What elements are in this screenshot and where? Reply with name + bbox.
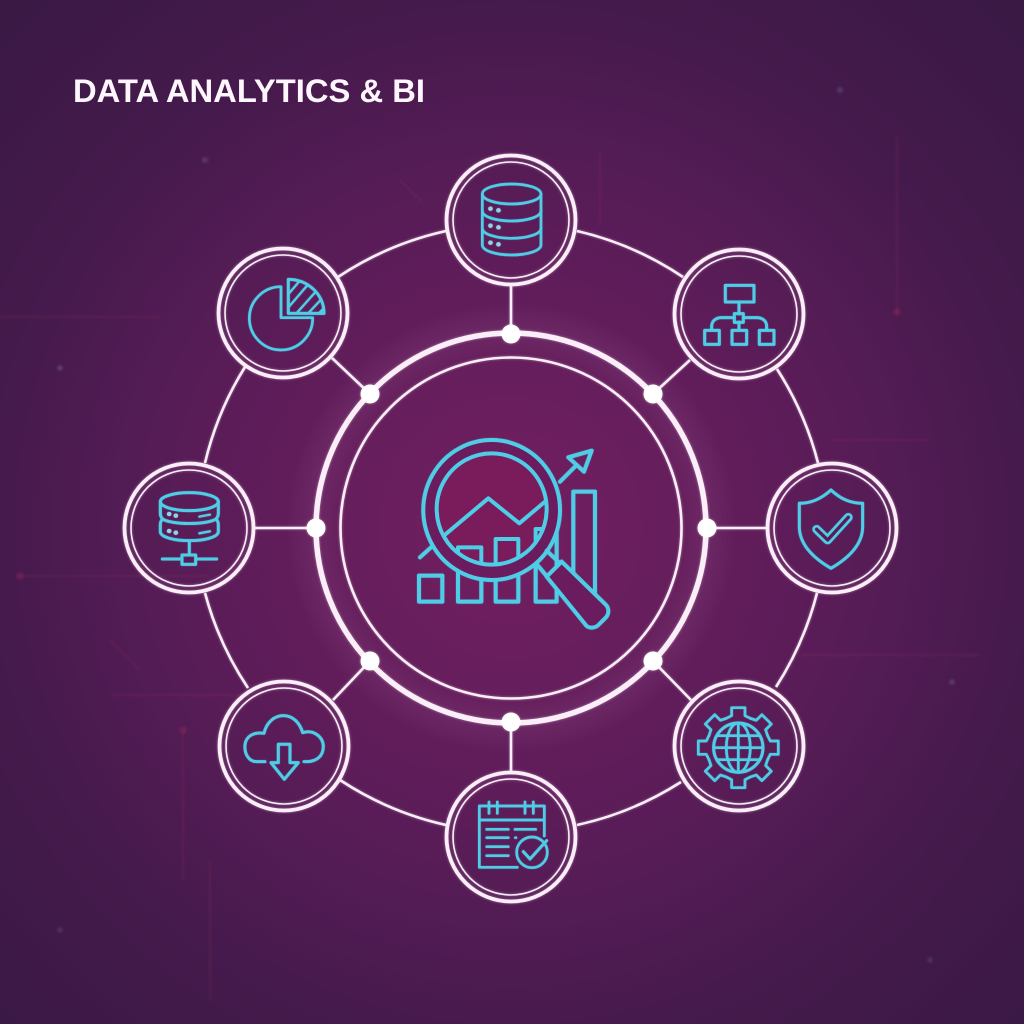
central hub rings [286, 303, 736, 753]
satellite ring: top left [218, 248, 348, 378]
icon: server network [160, 493, 218, 564]
satellite ring: bottom right [674, 682, 804, 810]
satellite ring: bottom [446, 772, 576, 902]
hub connection nodes [306, 324, 716, 732]
satellite ring: bottom left [220, 682, 348, 810]
icon: magnifying glass over bar chart [419, 440, 608, 628]
icon: pie chart [249, 277, 332, 350]
satellite ring: left [124, 464, 254, 592]
icon: database [482, 184, 541, 255]
title: DATA ANALYTICS & BI [73, 73, 425, 109]
spokes linking hub to satellites [254, 285, 766, 772]
satellite ring: top [446, 156, 576, 284]
icon: shield with check [799, 490, 863, 568]
satellite ring: top right [674, 250, 804, 378]
icon: cloud download [245, 716, 323, 779]
icon: gear with globe [698, 708, 778, 788]
satellite ring: right [768, 464, 896, 592]
icon: calendar with check [479, 802, 547, 868]
icon: org chart [705, 285, 774, 344]
outer orbit connecting arcs [205, 231, 818, 825]
